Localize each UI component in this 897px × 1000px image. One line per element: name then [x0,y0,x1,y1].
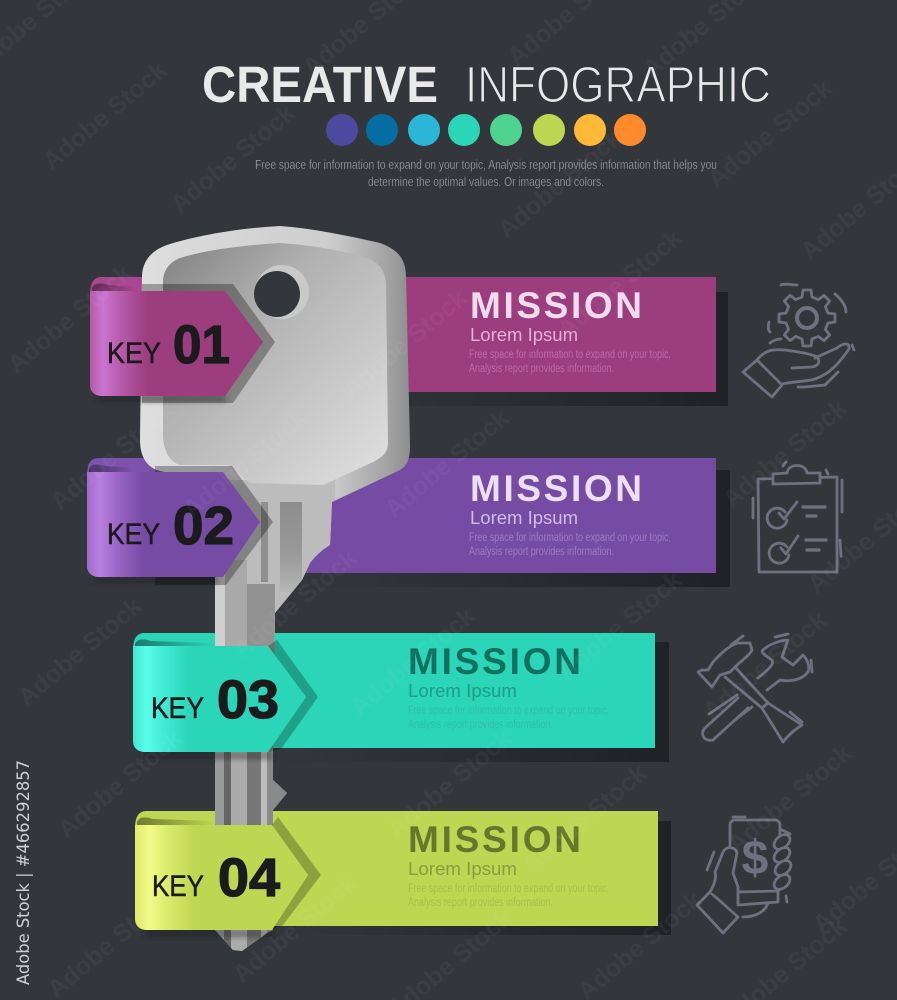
watermark: Adobe Stock [379,404,514,524]
text block 2: Free space for information to expand on your topic, [469,532,671,544]
title: CREATIVE [202,56,438,113]
watermark: Adobe Stock [697,606,832,726]
ribbon 4: 04 [218,848,280,908]
ribbon 1: KEY [107,337,161,370]
watermark: Adobe Stock [165,99,300,219]
text block 1 [469,285,671,375]
text block 1: Analysis report provides information. [469,363,614,375]
watermark: Adobe Stock [552,566,687,686]
watermark: Adobe Stock [382,724,517,844]
title [202,56,771,113]
watermark: Adobe Stock [227,869,362,989]
text block 4: MISSION [408,819,581,860]
text block 3: MISSION [408,641,581,682]
ribbon 1 [90,284,275,403]
band 3 [133,633,669,762]
band 2 [87,458,730,587]
text block 1: Lorem Ipsum [470,325,578,345]
watermark: Adobe Stock [337,284,472,404]
icon: hand with phone [697,817,794,933]
text block 4 [408,819,609,909]
ribbon 4: KEY [152,870,204,903]
watermark: Adobe Stock [702,74,837,194]
icon: hammer and wrench [698,634,812,742]
text block 3 [408,641,609,731]
watermark: Adobe Stock [345,602,480,722]
text block 3: Lorem Ipsum [408,681,517,701]
icon: gear in hand [743,284,854,397]
icon: clipboard [753,462,842,572]
text block 2: MISSION [470,468,642,509]
ribbon 3: 03 [217,670,279,730]
ribbon 2 [87,466,273,585]
ribbon 1: 01 [173,315,230,375]
text block 4: Analysis report provides information. [408,897,553,909]
text block 3: Analysis report provides information. [408,719,553,731]
watermark: Adobe Stock [45,396,180,516]
ribbon 3 [133,640,318,759]
watermark: Adobe Stock [492,124,627,244]
watermark: Adobe Stock [722,739,857,859]
text block 4: Lorem Ipsum [408,859,517,879]
subtitle: determine the optimal values. Or images and colors. [368,174,604,189]
watermark: Adobe Stock [517,759,652,879]
text block 2: Analysis report provides information. [469,546,614,558]
text block 2: Lorem Ipsum [470,508,578,528]
band 4 [135,811,671,935]
ribbon 2: KEY [107,518,160,551]
text block 1: Free space for information to expand on your topic, [469,349,671,361]
text block 2 [469,468,671,558]
icon: hand with phone: $ [742,832,769,885]
watermark: Adobe Stock [12,592,147,712]
subtitle: Free space for information to expand on your topic, Analysis report provides information that helps you [255,157,717,172]
watermark: Adobe Stock [37,56,172,176]
watermark: Adobe Stock [227,544,362,664]
watermark: Adobe Stock [552,224,687,344]
colour dots [326,114,646,146]
ribbon 3: KEY [151,692,204,725]
watermark: Adobe Stock [2,259,137,379]
watermark: Adobe Stock [52,724,187,844]
ribbon 2: 02 [173,496,234,556]
stock id caption: Adobe Stock | #466292857 [14,760,34,985]
band 1 [90,277,728,406]
text block 3: Free space for information to expand on your topic, [408,705,609,717]
text block 1: MISSION [470,285,642,326]
subtitle [255,157,717,189]
key [140,226,410,952]
title: INFOGRAPHIC [465,56,771,113]
watermark: Adobe Stock [177,404,312,524]
text block 4: Free space for information to expand on your topic, [408,883,609,895]
watermark: Adobe Stock [717,394,852,514]
ribbon 4 [135,817,321,937]
